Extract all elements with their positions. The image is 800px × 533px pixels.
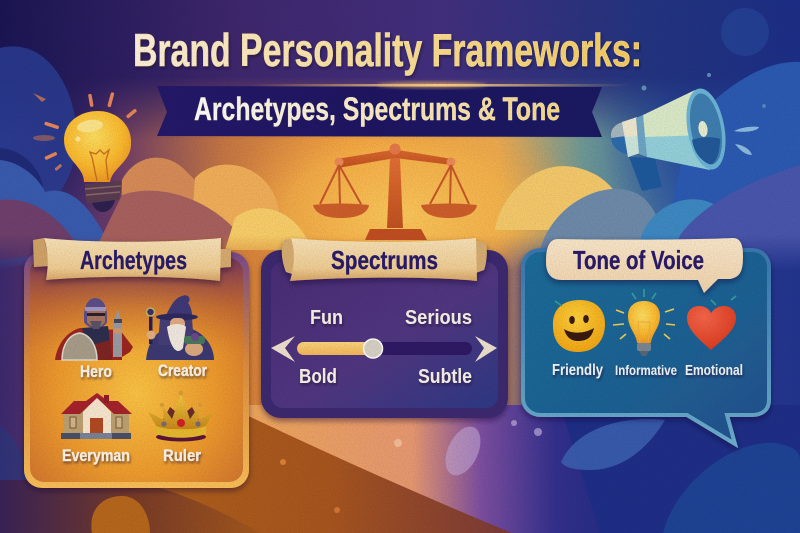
speech bubble heading xyxy=(546,238,743,293)
label: serious: Serious xyxy=(405,307,472,329)
label: bold: Bold xyxy=(299,366,337,388)
icon: megaphone xyxy=(611,85,759,191)
subtitle banner: Archetypes, Spectrums & Tone xyxy=(194,91,560,127)
scroll heading: spectrums: Spectrums xyxy=(331,245,438,275)
icon: light bulb xyxy=(33,92,137,212)
right hills xyxy=(495,166,630,230)
label: informative: Informative xyxy=(615,362,677,378)
icon: ruler crown xyxy=(148,391,214,442)
scroll heading: archetypes: Archetypes xyxy=(80,245,187,275)
label: fun: Fun xyxy=(310,307,343,329)
label: emotional: Emotional xyxy=(685,362,743,379)
arrow: right xyxy=(475,336,497,362)
subtitle banner xyxy=(157,82,630,137)
label: creator: Creator xyxy=(158,361,207,380)
icon: heart xyxy=(687,306,736,350)
panel: archetypes xyxy=(24,238,249,488)
scroll heading: spectrums xyxy=(282,238,487,281)
slider xyxy=(297,339,472,358)
label: subtle: Subtle xyxy=(418,366,472,388)
lower area xyxy=(0,237,800,460)
label: ruler: Ruler xyxy=(163,446,201,465)
panel: tone of voice xyxy=(523,238,769,444)
label: hero: Hero xyxy=(80,362,112,381)
icon: creator xyxy=(146,295,214,360)
icon: balance scale xyxy=(313,144,477,240)
icon: smiley xyxy=(553,300,605,352)
label: friendly: Friendly xyxy=(552,362,603,379)
left hills xyxy=(0,46,77,230)
icon: informative bulb xyxy=(555,289,736,356)
icon: everyman house xyxy=(61,393,132,439)
scroll heading: archetypes xyxy=(33,238,231,281)
speech bubble heading: Tone of Voice xyxy=(573,245,704,275)
label: everyman: Everyman xyxy=(62,446,130,465)
panel: spectrums xyxy=(261,238,508,418)
arrow: left xyxy=(271,336,295,362)
icon: hero xyxy=(55,298,133,360)
